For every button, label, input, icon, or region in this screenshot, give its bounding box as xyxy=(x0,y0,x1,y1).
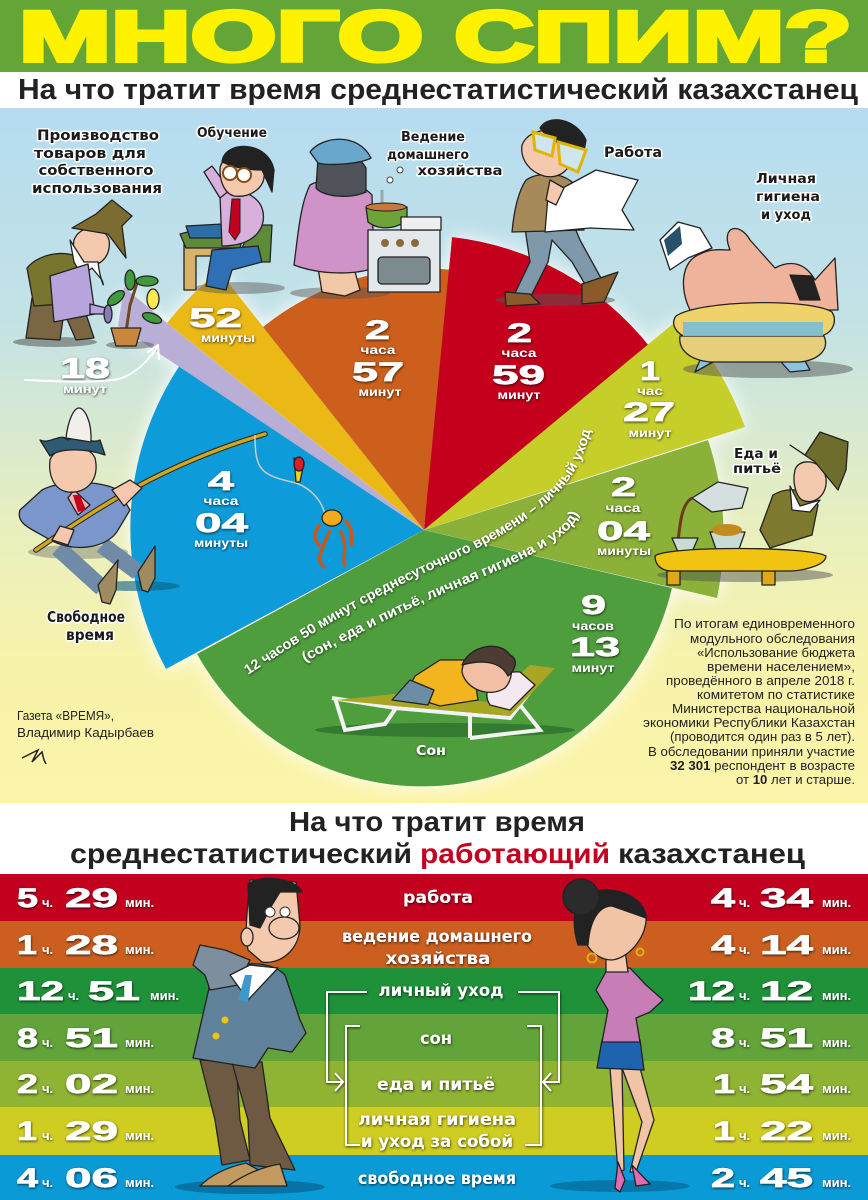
row: housework, women: 4 xyxy=(711,930,735,960)
label: hygiene: гигиена xyxy=(756,190,820,205)
row: free time, women: 45 xyxy=(760,1163,813,1193)
row: free time, men: 06 xyxy=(65,1163,118,1193)
row: sleep, men xyxy=(17,1023,154,1053)
slice: study xyxy=(167,271,424,530)
label: work: Работа xyxy=(604,145,662,161)
value: 2 h 59 min xyxy=(492,318,545,402)
label: eating: питьё xyxy=(733,462,781,477)
illustration: office worker xyxy=(495,120,638,306)
label: free time: Свободное xyxy=(47,608,125,626)
table bands xyxy=(0,874,868,1200)
row: housework, men: мин. xyxy=(125,942,154,957)
row: housework, women xyxy=(711,930,851,960)
second heading: На что тратит время xyxy=(289,806,585,837)
row: hygiene, women xyxy=(713,1116,851,1146)
pie values xyxy=(60,303,675,675)
value: 1 h 27 min: 1 xyxy=(640,356,660,386)
methodology note xyxy=(643,616,856,787)
center labels: личная гигиена xyxy=(358,1110,516,1130)
row: eating, women xyxy=(713,1069,851,1099)
row: free time, men xyxy=(17,1163,154,1193)
row: personal care, men xyxy=(17,976,179,1006)
row: personal care, women: мин. xyxy=(822,988,851,1003)
left leg xyxy=(200,1060,250,1165)
curved caption: personal care total: 12 часов 50 минут среднесуточного времени – личный уход xyxy=(244,429,595,676)
row: personal care, women: ч. xyxy=(739,988,750,1003)
row: housework, men xyxy=(17,930,154,960)
row: housework, men: 1 xyxy=(17,930,37,960)
curved caption: personal care total: (сон, еда и питьё, личная гигиена и уход) xyxy=(302,511,582,666)
methodology note: времени населением», xyxy=(707,659,855,674)
value: 4 h 04 min: 4 xyxy=(208,466,234,496)
row: free time, men: 4 xyxy=(17,1163,38,1193)
row: eating, men xyxy=(17,1069,154,1099)
row: work, men: 29 xyxy=(65,883,118,913)
illustration: tea drinker xyxy=(655,432,848,585)
value: 2 h 04 min: минуты xyxy=(597,544,651,558)
value: 2 h 59 min: часа xyxy=(502,346,537,360)
right leg xyxy=(232,1062,295,1170)
value: 52 minutes xyxy=(189,303,255,345)
value: 1 h 27 min xyxy=(623,356,675,440)
illustration: student xyxy=(180,146,285,294)
brackets and arrows xyxy=(327,992,559,1145)
label: housework: хозяйства xyxy=(418,164,502,179)
row: work, men: 5 xyxy=(17,883,38,913)
center labels: ведение домашнего xyxy=(342,927,532,947)
value: 2 h 04 min: 2 xyxy=(611,472,636,502)
row: eating, women: 54 xyxy=(760,1069,813,1099)
center labels: личный уход xyxy=(378,981,504,1001)
row: work, men xyxy=(17,883,154,913)
second heading: среднестатистический xyxy=(70,838,412,869)
label: home production line 3: собственного xyxy=(38,163,154,179)
value: 4 h 04 min: часа xyxy=(204,494,239,508)
value: 52 minutes: минуты xyxy=(201,331,255,345)
row: sleep, women: ч. xyxy=(739,1035,750,1050)
right column: women values xyxy=(688,883,851,1193)
value: 9 h 13 min: часов xyxy=(572,619,614,633)
subtitle: На что тратит время среднестатистический казахстанец xyxy=(18,74,858,106)
row: work, women: ч. xyxy=(739,895,750,910)
value: 2 h 59 min: минут xyxy=(498,388,541,402)
row: personal care, women xyxy=(688,976,851,1006)
label: home production: Производство xyxy=(37,128,159,144)
row: sleep, women: 8 xyxy=(711,1023,735,1053)
center labels: и уход за собой xyxy=(361,1132,513,1152)
row: sleep, men: ч. xyxy=(42,1035,53,1050)
row: sleep, women: мин. xyxy=(822,1035,851,1050)
illustration: sleeper xyxy=(315,646,575,738)
value: 2 h 57 min xyxy=(352,315,404,399)
pie chart xyxy=(118,237,745,786)
row: personal care, men: мин. xyxy=(150,988,179,1003)
row: personal care, men: 51 xyxy=(88,976,140,1006)
left column: men values xyxy=(17,883,179,1193)
illustration: gardener xyxy=(13,200,163,349)
label: home production line 2: товаров для xyxy=(34,146,146,162)
row: eating, women: мин. xyxy=(822,1081,851,1096)
row: sleep, men: мин. xyxy=(125,1035,154,1050)
row: free time, women: мин. xyxy=(822,1175,851,1190)
row: eating, men: 02 xyxy=(65,1069,118,1099)
row: free time, women: 2 xyxy=(711,1163,735,1193)
center labels xyxy=(342,888,532,1189)
row: work, men: мин. xyxy=(125,895,154,910)
methodology note: «Использование бюджета xyxy=(697,645,856,660)
credit: Владимир Кадырбаев xyxy=(17,725,154,740)
background panel xyxy=(0,108,868,803)
methodology note: модульного обследования xyxy=(690,631,855,646)
row: work, women: мин. xyxy=(822,895,851,910)
row: eating, men: мин. xyxy=(125,1081,154,1096)
value: 18 minutes: минут xyxy=(63,382,107,396)
jacket xyxy=(193,964,306,1068)
illustration: cook xyxy=(290,139,441,299)
row: housework, men: 28 xyxy=(65,930,118,960)
label: housework: Ведение xyxy=(401,130,465,145)
center labels: сон xyxy=(420,1029,452,1049)
row: personal care, women: 12 xyxy=(688,976,735,1006)
slice: hygiene xyxy=(424,318,745,530)
value: 2 h 57 min: 57 xyxy=(352,357,404,387)
methodology note: Министерства национальной xyxy=(672,701,855,716)
illustration: woman xyxy=(550,879,690,1192)
row: sleep, women: 51 xyxy=(760,1023,813,1053)
value: 2 h 57 min: минут xyxy=(358,385,402,399)
row: hygiene, men: мин. xyxy=(125,1128,154,1143)
center labels: хозяйства xyxy=(386,949,490,969)
title banner: МНОГО СПИМ? xyxy=(19,0,852,77)
second heading: работающий xyxy=(420,838,610,869)
row: work, men: ч. xyxy=(42,895,53,910)
center labels: еда и питьё xyxy=(377,1075,495,1095)
row: free time, women: ч. xyxy=(739,1175,750,1190)
row: housework, women: мин. xyxy=(822,942,851,957)
value: 4 h 04 min xyxy=(194,466,248,550)
slice: home production xyxy=(118,287,424,530)
arrow: 18 minutes xyxy=(25,345,159,382)
value: 2 h 04 min xyxy=(597,472,651,558)
row: eating, women: 1 xyxy=(713,1069,735,1099)
methodology note: проведённого в апреле 2018 г. xyxy=(666,673,855,688)
value: 9 h 13 min: минут xyxy=(572,661,615,675)
label: free time: время xyxy=(66,626,114,644)
label: eating: Еда и xyxy=(734,447,778,462)
row: hygiene, men: ч. xyxy=(42,1128,53,1143)
label: housework: домашнего xyxy=(387,148,469,163)
row: free time, men: мин. xyxy=(125,1175,154,1190)
label: hygiene: и уход xyxy=(761,208,811,223)
methodology note: комитетом по статистике xyxy=(697,687,855,702)
methodology note: от 10 лет и старше. xyxy=(736,772,855,787)
value: 4 h 04 min: 04 xyxy=(195,508,248,538)
row: hygiene, women: мин. xyxy=(822,1128,851,1143)
value: 9 h 13 min: 13 xyxy=(570,632,620,662)
illustration: fisherman xyxy=(19,408,352,604)
row: work, women: 34 xyxy=(760,883,813,913)
value: 18 minutes: 18 xyxy=(60,353,110,385)
row: personal care, men: 12 xyxy=(17,976,64,1006)
label: free time xyxy=(47,608,125,644)
row: sleep, men: 8 xyxy=(17,1023,38,1053)
row: hygiene, women: 1 xyxy=(713,1116,735,1146)
row: hygiene, men xyxy=(17,1116,154,1146)
value: 2 h 57 min: часа xyxy=(360,343,396,357)
methodology note: экономики Республики Казахстан xyxy=(643,715,855,730)
value: 1 h 27 min: 27 xyxy=(623,397,675,427)
row: free time, men: ч. xyxy=(42,1175,53,1190)
slice: housework xyxy=(263,269,455,530)
row: work, women xyxy=(711,883,851,913)
row: hygiene, men: 1 xyxy=(17,1116,37,1146)
illustration: man xyxy=(175,878,325,1194)
row: hygiene, women: ч. xyxy=(739,1128,750,1143)
row: housework, women: ч. xyxy=(739,942,750,957)
second heading xyxy=(0,803,868,874)
row: work, women: 4 xyxy=(711,883,735,913)
label: hygiene: Личная xyxy=(756,172,816,187)
row: sleep, women xyxy=(711,1023,851,1053)
value: 9 h 13 min: 9 xyxy=(581,590,606,620)
value: 2 h 59 min: 59 xyxy=(492,360,545,390)
methodology note: (проводится один раз в 5 лет). xyxy=(670,729,855,744)
value: 1 h 27 min: минут xyxy=(628,426,672,440)
slice: free time xyxy=(130,365,424,669)
row: free time, women xyxy=(711,1163,851,1193)
credit xyxy=(17,708,154,764)
row: eating, men: ч. xyxy=(42,1081,53,1096)
value: 4 h 04 min: минуты xyxy=(194,536,248,550)
row: hygiene, women: 22 xyxy=(760,1116,813,1146)
value: 52 minutes: 52 xyxy=(189,303,242,333)
value: 2 h 57 min: 2 xyxy=(365,315,390,345)
slice: work xyxy=(424,237,650,530)
label: home production line 4: использования xyxy=(32,181,162,197)
row: housework, men: ч. xyxy=(42,942,53,957)
value: 9 h 13 min xyxy=(570,590,620,675)
second heading: казахстанец xyxy=(618,838,805,869)
center labels: работа xyxy=(403,888,473,908)
value: 18 minutes xyxy=(60,353,110,396)
value: 2 h 04 min: 04 xyxy=(597,516,650,546)
label: hygiene xyxy=(756,172,820,223)
methodology note: 32 301 респондент в возрасте xyxy=(670,758,855,773)
row: hygiene, men: 29 xyxy=(65,1116,118,1146)
value: 2 h 04 min: часа xyxy=(606,501,641,515)
slice: sleep xyxy=(197,530,672,786)
label: housework xyxy=(387,130,502,179)
row: sleep, men: 51 xyxy=(65,1023,118,1053)
value: 1 h 27 min: час xyxy=(637,384,663,398)
row: eating, women: ч. xyxy=(739,1081,750,1096)
signature xyxy=(22,750,46,764)
label: study: Обучение xyxy=(197,126,267,141)
illustration: man in bath xyxy=(660,222,853,378)
methodology note: В обследовании приняли участие xyxy=(648,744,855,759)
center labels: свободное время xyxy=(358,1169,516,1189)
row: eating, men: 2 xyxy=(17,1069,38,1099)
methodology note: По итогам единовременного xyxy=(674,616,855,631)
title banner xyxy=(0,0,868,77)
label: sleep: Сон xyxy=(416,744,446,759)
row: personal care, women: 12 xyxy=(760,976,813,1006)
row: personal care, men: ч. xyxy=(68,988,79,1003)
value: 2 h 59 min: 2 xyxy=(507,318,532,348)
label: eating xyxy=(733,447,781,477)
slice: eating xyxy=(424,440,724,598)
row: housework, women: 14 xyxy=(760,930,813,960)
credit: Газета «ВРЕМЯ», xyxy=(17,708,114,723)
